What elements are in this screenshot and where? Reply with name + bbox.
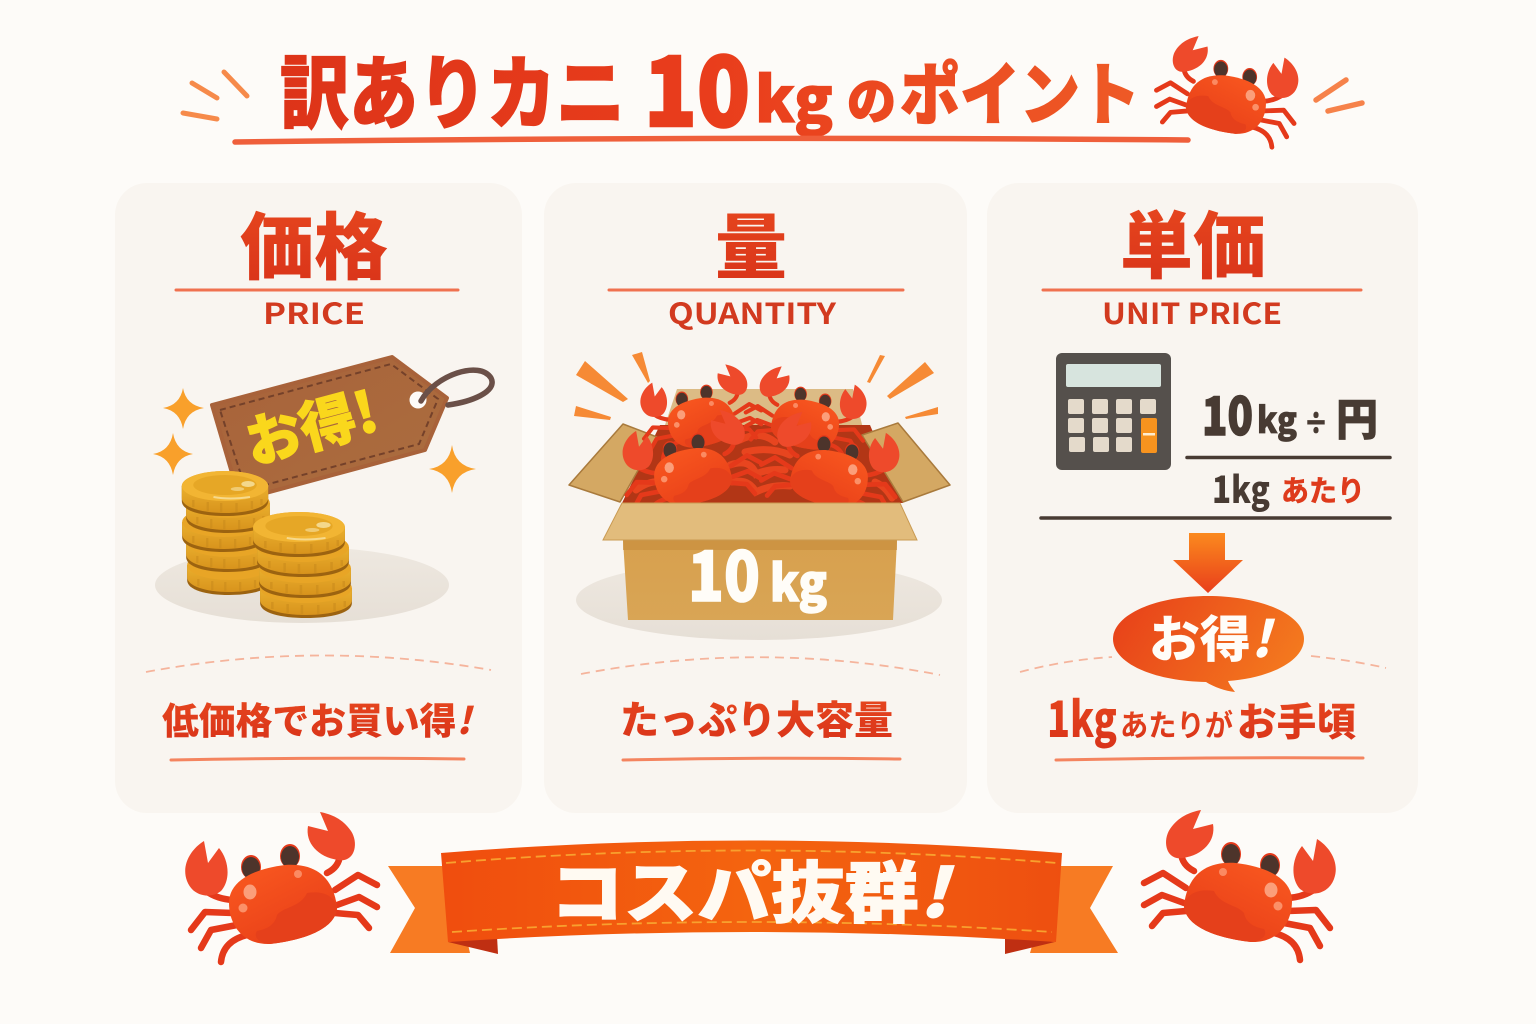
unit price caption rule [1056, 758, 1363, 760]
quantity dashed arc [581, 657, 940, 675]
tag text: お得! [235, 367, 386, 480]
title: 10 [644, 18, 750, 154]
quantity caption: たっぷり大容量 [620, 690, 893, 746]
unit price caption: 1kg [1047, 681, 1117, 752]
bubble text: お得! [1149, 600, 1275, 672]
formula numerator: 円 [1336, 384, 1378, 448]
speech bubble [1113, 596, 1304, 692]
formula fraction line [1187, 456, 1390, 459]
title [280, 18, 1140, 154]
quantity heading: 量 [715, 189, 787, 294]
price caption: 低価格でお買い得! [162, 691, 474, 745]
box back and interior [622, 389, 903, 503]
unit price heading: 単価 [1120, 188, 1266, 294]
box shadow [576, 560, 942, 640]
price heading rule [176, 288, 458, 292]
ribbon folds [448, 936, 1055, 954]
ribbon left tail [388, 866, 470, 953]
unit price caption: お手頃 [1237, 692, 1356, 748]
quantity caption rule [623, 758, 900, 760]
bottom right crab [1144, 810, 1336, 960]
price tag [212, 357, 492, 500]
burst rays [574, 352, 938, 420]
price subheading: PRICE [263, 291, 365, 333]
price dashed arc [146, 655, 491, 672]
unit price panel background [987, 183, 1418, 813]
banner ribbon [388, 840, 1118, 954]
arrow [1173, 533, 1243, 593]
right coin stack [253, 512, 352, 618]
formula bottom line [1041, 516, 1390, 520]
title: 訳ありカニ [280, 30, 625, 146]
unit price subheading: UNIT PRICE [1102, 291, 1282, 333]
quantity heading rule [609, 288, 903, 292]
price caption rule [171, 758, 464, 760]
formula denominator: あたり [1281, 468, 1365, 510]
panel: unit price [987, 183, 1418, 813]
sparkles [153, 388, 476, 493]
formula denominator [1212, 460, 1365, 514]
title crab [1156, 36, 1298, 147]
formula numerator: kg [1257, 392, 1297, 444]
box weight label [688, 522, 827, 621]
crabs in box [623, 364, 899, 520]
box front [603, 503, 917, 621]
formula numerator: 10 [1202, 375, 1253, 450]
title left burst lines [183, 72, 247, 119]
crab legs pile [636, 435, 892, 498]
ribbon band [441, 840, 1062, 942]
title: の [847, 62, 896, 134]
quantity panel background [544, 183, 967, 813]
price heading: 価格 [240, 189, 388, 295]
bottom left crab [185, 812, 377, 962]
unit price dashed arc left [1020, 657, 1112, 672]
formula numerator: ÷ [1304, 399, 1328, 443]
box side flaps [569, 423, 950, 502]
box weight label: kg [770, 544, 827, 616]
formula denominator: 1kg [1212, 460, 1270, 514]
title underline [235, 138, 1188, 142]
title: ポイント [900, 40, 1140, 139]
unit price heading rule [1043, 288, 1361, 292]
title right burst lines [1316, 80, 1362, 111]
unit price caption [1047, 681, 1356, 752]
unit price dashed arc right [1311, 656, 1386, 668]
box weight label: 10 [688, 522, 760, 621]
title: kg [755, 50, 833, 140]
panel: quantity [544, 183, 967, 813]
icon: calculator [1056, 353, 1171, 470]
quantity subheading: QUANTITY [668, 291, 837, 333]
panel: price [115, 183, 522, 813]
banner text: コスパ抜群 ! [550, 840, 955, 937]
formula numerator [1202, 375, 1378, 450]
price panel background [115, 183, 522, 813]
ribbon right tail [1030, 866, 1118, 953]
unit price caption: あたりが [1120, 701, 1233, 745]
ribbon stitching [446, 850, 1057, 932]
left coin stack [182, 471, 271, 595]
coin shadow [155, 547, 449, 623]
